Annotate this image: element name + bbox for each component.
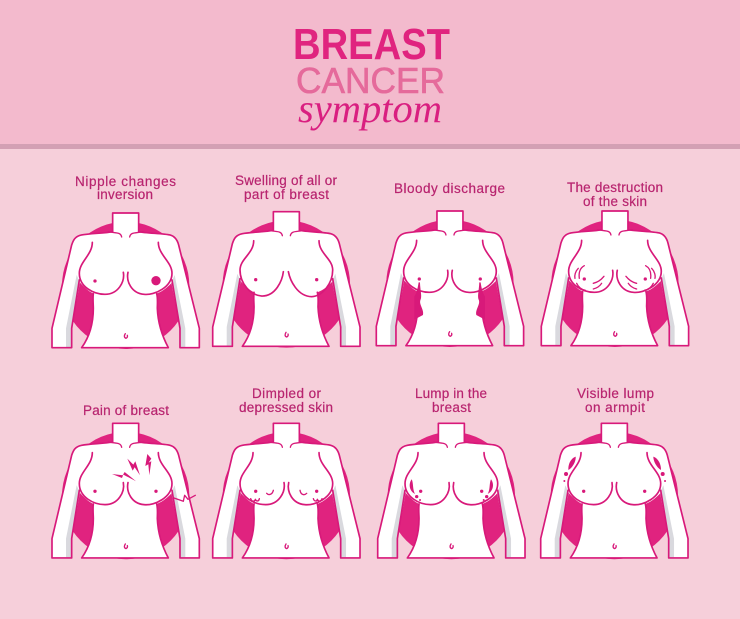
heading: visible lump on armpit: on armpit [585,400,645,415]
heading: visible lump on armpit: Visible lump [577,386,654,401]
heading: swelling: part of breast [244,187,329,202]
figure: dimpled skin [213,423,360,559]
heading: nipple changes [75,174,176,202]
title: BREAST [293,20,450,69]
heading: destruction of the skin: of the skin [583,194,647,209]
panel: pain of breast [52,403,199,559]
figure: destruction of the skin [541,211,689,347]
heading: pain of breast: Pain of breast [83,403,169,418]
panel: visible lump on armpit [541,386,688,559]
heading: dimpled or depressed skin: Dimpled or [252,386,322,401]
heading: swelling [235,173,338,202]
heading: dimpled or depressed skin [239,386,333,415]
header band [0,0,740,144]
heading: dimpled or depressed skin: depressed skin [239,400,333,415]
heading: lump in the breast: Lump in the [415,386,487,401]
heading: nipple changes: inversion [97,187,153,202]
title [293,20,450,131]
title: CANCER [296,60,445,101]
panel: bloody discharge [376,181,524,347]
panel: lump in the breast [378,386,525,559]
heading: swelling: Swelling of all or [235,173,338,188]
heading: visible lump on armpit [577,386,654,415]
figure: bloody discharge [376,211,524,347]
figure: pain of breast [52,423,199,559]
heading: nipple changes: Nipple changes [75,174,176,189]
heading: destruction of the skin: The destruction [567,180,663,195]
title: symptom [298,86,442,131]
panel: destruction of the skin [541,180,689,347]
figure: lump in the breast [378,423,525,559]
heading: lump in the breast [415,386,487,415]
heading: lump in the breast: breast [432,400,471,415]
panel: swelling [213,173,360,348]
panel: nipple changes inversion [52,174,199,349]
heading: destruction of the skin [567,180,663,209]
figure: nipple inversion [52,213,199,349]
icon: pain bolts [112,454,195,501]
panel: dimpled skin [213,386,360,559]
heading: bloody discharge: Bloody discharge [394,181,505,196]
figure: swelling [213,212,360,348]
figure: visible lump on armpit [541,423,688,559]
